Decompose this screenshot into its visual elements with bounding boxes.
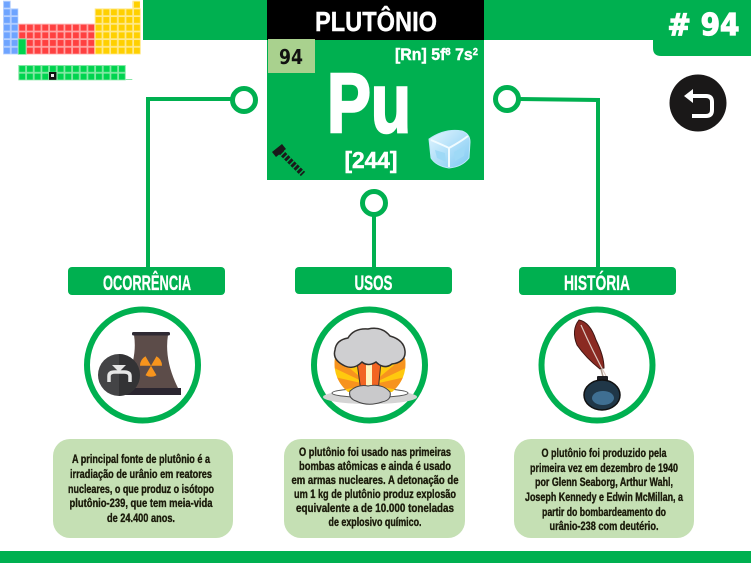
panel: história icon [542, 310, 652, 420]
text block: ocorrência: irradiação de urânio em reatores [70, 469, 212, 481]
heading: ocorrência: OCORRÊNCIA [103, 271, 191, 295]
icon: cooling tower [98, 332, 181, 396]
electron configuration: 2 [473, 47, 478, 58]
text block: história: O plutônio foi produzido pela [542, 448, 667, 460]
element number tab: # 94 [668, 8, 740, 43]
atomic mass: [244] [344, 147, 398, 173]
bottom green bar [0, 551, 751, 563]
text block: usos: bombas atômicas e ainda é usado [299, 461, 451, 473]
text block: ocorrência: nucleares, o que produz o isótopo [68, 484, 214, 496]
heading: usos [295, 267, 452, 295]
text block: usos: em armas nucleares. A detonação de [292, 475, 458, 487]
title: PLUTÔNIO [315, 5, 437, 37]
connector: história [496, 88, 598, 267]
text block: história [514, 439, 694, 538]
text block: história: urânio-238 com deutério. [550, 521, 658, 533]
icon: screw [272, 144, 303, 174]
electron configuration: 7s [451, 45, 473, 64]
electron configuration: [Rn] 5f [395, 45, 449, 64]
panel: usos icon [314, 310, 425, 420]
text block: história: Joseph Kennedy e Edwin McMillan, a [525, 492, 683, 504]
heading: história: HISTÓRIA [564, 271, 630, 295]
heading: ocorrência [68, 267, 225, 295]
electron configuration: 8 [445, 47, 451, 58]
icon: back button [670, 74, 726, 132]
periodic table locator [3, 1, 141, 80]
element card [267, 39, 484, 180]
heading: usos: USOS [354, 272, 392, 295]
icon: mushroom cloud [323, 328, 417, 404]
connector: ocorrência [148, 88, 256, 267]
heading: história [519, 267, 676, 295]
text block: história: primeira vez em dezembro de 1940 [530, 463, 678, 475]
icon: ice cube [429, 130, 470, 168]
icon: quill and inkwell [574, 320, 620, 410]
text block: ocorrência: plutônio-239, que tem meia-vida [70, 498, 213, 510]
connector: usos [362, 192, 386, 267]
element symbol: Pu [327, 56, 411, 150]
text block: ocorrência [53, 439, 233, 538]
element number tab [653, 8, 751, 56]
title [267, 0, 484, 40]
text block: usos [284, 439, 465, 538]
text block: história: por Glenn Seaborg, Arthur Wahl, [535, 477, 673, 489]
text block: usos: de explosivo químico. [328, 517, 422, 529]
panel: ocorrência icon [87, 310, 198, 420]
text block: usos: O plutônio foi usado nas primeiras [299, 447, 451, 459]
atomic number: 94 [279, 45, 303, 69]
text block: usos: um 1 kg de plutônio produz explosão [294, 489, 456, 501]
text block: ocorrência: de 24.400 anos. [107, 513, 175, 525]
text block: usos: equivalente a de 10.000 toneladas [296, 503, 454, 515]
top green bar [143, 0, 751, 40]
text block: história: partir do bombardeamento do [542, 507, 666, 519]
text block: ocorrência: A principal fonte de plutônio é a [72, 454, 210, 466]
atomic number [268, 39, 315, 73]
